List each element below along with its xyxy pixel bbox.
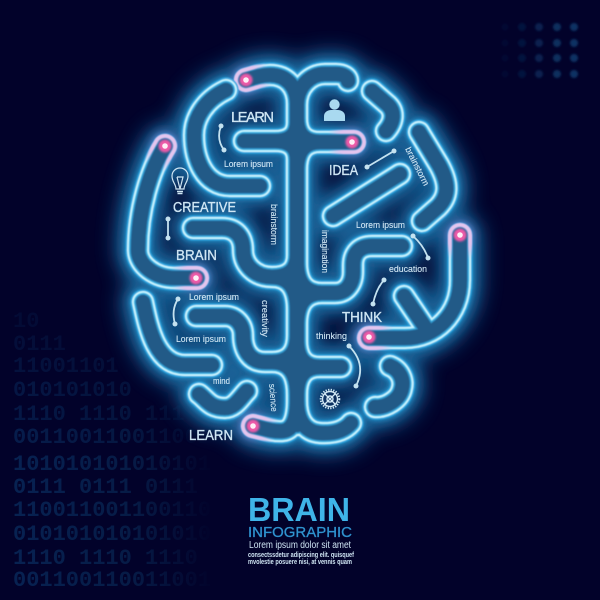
binary code pattern bottom left: 1110 1110 1110 11 — [13, 546, 237, 571]
label: science: science — [267, 383, 279, 412]
binary code pattern bottom left: 0111 0111 0111 0111 — [13, 475, 264, 500]
binary code pattern bottom left: 0011001100110011 — [13, 568, 224, 593]
neon tube: right lower curl — [375, 366, 402, 407]
neon tube: left upper lobe — [194, 90, 260, 186]
label: Lorem ipsum top: Lorem ipsum — [224, 159, 273, 169]
label: Lorem ipsum right: Lorem ipsum — [356, 220, 405, 230]
neon tube: right boomerang lobe — [419, 132, 446, 221]
label: IDEA: IDEA — [329, 163, 358, 179]
body line 2: mvolestie posuere nisi, at vennis quam — [248, 557, 352, 566]
connector: idea — [364, 148, 396, 170]
label: brainstorm right: brainstorm — [403, 145, 431, 187]
label: mind: mind — [213, 376, 230, 386]
label: THINK: THINK — [342, 310, 382, 326]
connector: creative — [166, 216, 170, 240]
subtitle: INFOGRAPHIC: INFOGRAPHIC — [248, 524, 352, 541]
label: creativity: creativity — [260, 300, 270, 338]
binary code pattern bottom left: 11001101 — [13, 354, 119, 379]
neon tube: right top lobe — [372, 91, 393, 131]
connector: learn — [218, 124, 226, 152]
connector: thinking — [346, 344, 360, 388]
binary code pattern bottom left: 1110 1110 111 — [13, 402, 185, 427]
body line 1: consectssdetur adipiscing elit. quisquef — [248, 550, 354, 559]
label: brainstorm left: brainstorm — [269, 204, 279, 245]
brain glow — [138, 74, 460, 433]
neon tube: mind lobe — [199, 391, 247, 408]
label: Lorem ipsum lower left: Lorem ipsum — [176, 334, 226, 344]
icon: gear — [321, 390, 339, 408]
label: LEARN bottom: LEARN — [189, 428, 233, 444]
binary code pattern bottom left: 0111 — [13, 332, 66, 357]
icon: light bulb — [172, 168, 188, 194]
neon tube: left lower lobe — [143, 302, 212, 365]
neon tube: left outer lobe — [125, 133, 210, 291]
pink glowing nodes — [158, 74, 466, 432]
label: education: education — [389, 264, 427, 274]
label: BRAIN: BRAIN — [176, 248, 217, 264]
binary code pattern bottom left: 010101010 — [13, 378, 132, 403]
connector: think — [370, 278, 386, 306]
connector: education — [410, 234, 430, 260]
label: thinking: thinking — [316, 331, 347, 341]
binary code pattern bottom left: 0101010101010101 — [13, 522, 224, 547]
icon: person — [324, 99, 345, 121]
label: Lorem ipsum upper left: Lorem ipsum — [189, 292, 239, 302]
pink node glows — [152, 67, 473, 439]
dot pattern top right — [502, 23, 578, 78]
connector: lorem left — [172, 296, 180, 326]
title: BRAIN: BRAIN — [248, 491, 350, 528]
tagline: Lorem ipsum dolor sit amet — [249, 540, 351, 551]
neon tube: right outer lobe — [356, 214, 473, 358]
neon tube: main stem with branches — [193, 54, 402, 452]
label: LEARN top: LEARN — [231, 110, 274, 126]
label: imagination: imagination — [320, 230, 330, 273]
binary code pattern bottom left — [13, 309, 264, 593]
binary code pattern bottom left: 0011001100110011 — [13, 425, 224, 450]
binary code pattern bottom left: 1100110011001100 — [13, 498, 224, 523]
binary code pattern bottom left: 10 — [13, 309, 39, 334]
binary code pattern bottom left: 1010101010101010 — [13, 452, 224, 477]
neon tube: diagonal capsule — [333, 174, 400, 216]
label: CREATIVE: CREATIVE — [173, 200, 236, 216]
title block — [248, 491, 354, 566]
